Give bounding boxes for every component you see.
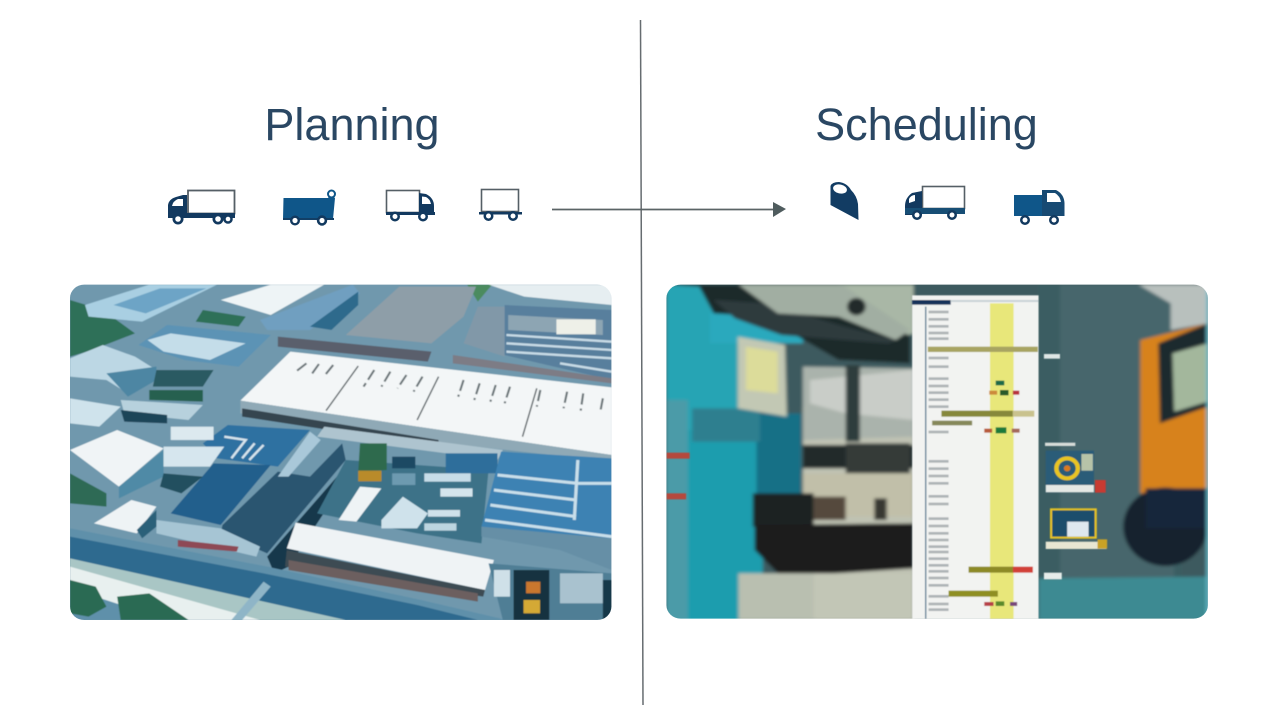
red parked cars [178,540,239,552]
bottom right corner [489,563,612,620]
photo: machine with scheduling chart overlay [660,280,1220,627]
schedule chart overlay [912,295,1039,622]
lower dark tool [803,445,914,468]
bottom long white building [287,523,494,590]
greenery [70,300,135,357]
top right building [464,307,506,357]
left white block [70,430,164,487]
icon: map pin shape [830,182,858,220]
icon: solid blue truck [283,190,335,226]
icon: solid blue truck 2 [1014,190,1064,225]
dark machine right [1123,487,1207,566]
title: Planning: Planning [264,99,440,150]
title: Scheduling: Scheduling [815,99,1038,150]
top-left roofs [85,285,217,322]
cyan column [666,284,740,432]
roadside greenery [70,580,106,617]
centre blue buildings [203,425,310,467]
big white roof [240,352,612,455]
red truck rows [278,337,431,362]
divider line [640,20,643,705]
roads [70,528,506,620]
left mid building [139,325,271,367]
head and arm [666,285,910,363]
icon: box truck outline 2 [905,186,965,220]
right wall [1039,285,1181,581]
red markers on column [666,354,1062,579]
floating diagrams on wall [1045,443,1107,549]
centre right small buildings [317,460,489,543]
orange cabinet [1140,323,1208,493]
right blue building [481,452,612,547]
icon: delivery truck outline [386,190,435,222]
photo: aerial view of factory complex [60,280,620,627]
grey roof [346,287,476,343]
machine background [799,434,913,576]
icon: trailer outline [479,190,522,221]
icon: box truck outline 1 [168,190,235,224]
arrow: planning to scheduling [552,202,786,217]
